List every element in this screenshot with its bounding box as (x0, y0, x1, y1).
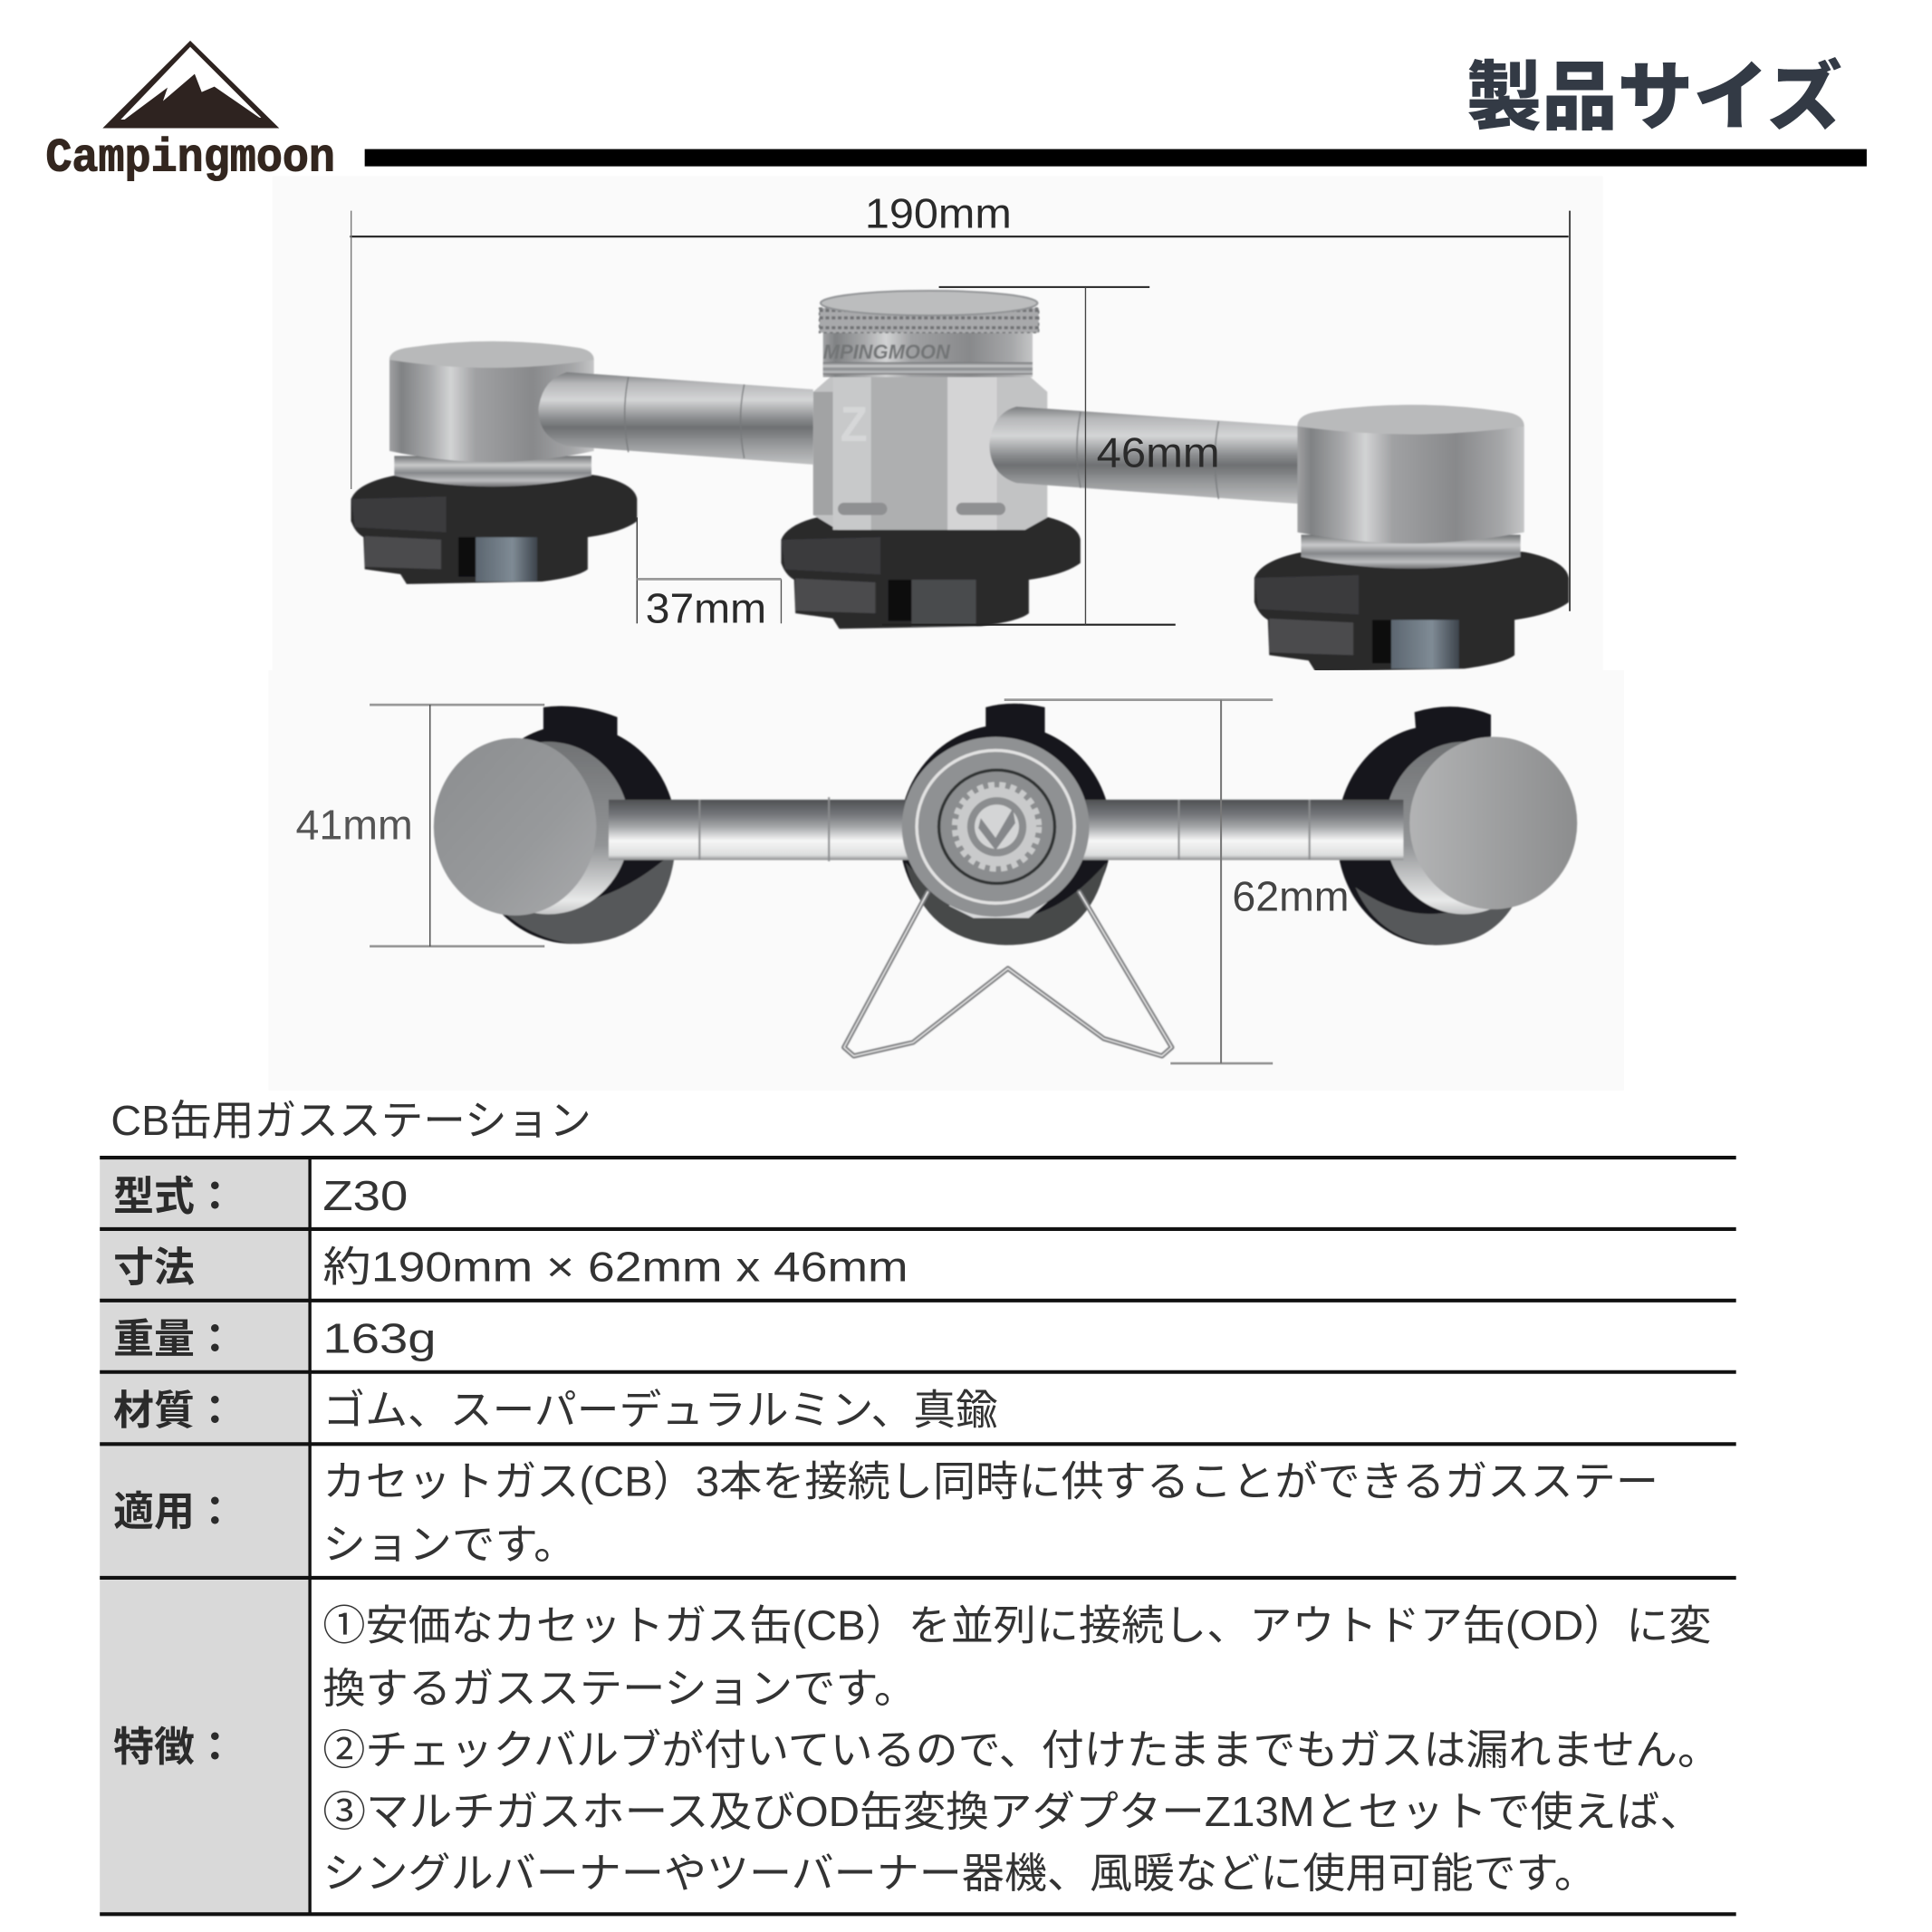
row: model: 型式： (113, 1163, 235, 1222)
row: features: ③マルチガスホース及びOD缶変換アダプターZ13Mとセットで使えば、 (322, 1788, 1703, 1835)
product: right tube (989, 407, 1302, 504)
product: side view assembly (351, 291, 1569, 671)
product: center base (781, 507, 1081, 629)
row: material: ゴム、スーパーデュラルミン、真鍮 (322, 1387, 998, 1434)
product: center hub: MPINGMOON (823, 341, 951, 363)
product: top view center hub (899, 704, 1111, 945)
header rule (365, 149, 1867, 167)
row: application: 適用： (113, 1478, 235, 1537)
panel: top view with dimensions (269, 670, 1624, 1091)
row: application: ションです。 (322, 1521, 577, 1568)
row: material: 材質： (113, 1378, 235, 1437)
dimension: 190mm: 190mm (865, 190, 1012, 237)
row: model: Z30 (322, 1172, 408, 1219)
table caption: CB缶用ガスステーション (111, 1097, 591, 1144)
row: features: 特徴： (113, 1714, 235, 1773)
dimension: 37mm: 37mm (646, 585, 766, 632)
spec table (100, 1157, 1736, 1915)
product: left tube (538, 372, 813, 465)
row: material (113, 1378, 998, 1437)
table rules (100, 1157, 1736, 1915)
row: dimensions: 寸法 (113, 1235, 195, 1293)
product: right base (1254, 544, 1569, 671)
row: model (113, 1163, 408, 1222)
title: 製品サイズ: 製品サイズ (1466, 36, 1842, 145)
row: weight: 163g (322, 1315, 437, 1362)
product: wire stand (844, 892, 1172, 1056)
row: weight: 重量： (113, 1306, 235, 1365)
product: center hub (813, 291, 1047, 530)
product: top view center disc with gear emblem (902, 736, 1090, 917)
row: features: ②チェックバルブが付いているので、付けたままでもガスは漏れません。 (322, 1726, 1720, 1773)
row: features (113, 1602, 1720, 1897)
product: right canister (1297, 405, 1524, 569)
product: top view left puck (434, 706, 677, 944)
row: weight (113, 1306, 437, 1365)
row: dimensions (113, 1235, 908, 1293)
product: top view tube (609, 797, 1403, 861)
row: application (113, 1457, 1658, 1568)
dimension: 46mm: 46mm (1097, 429, 1220, 476)
product: left canister (389, 341, 594, 486)
icon: mountain triangle (102, 41, 279, 128)
dimension: 62mm: 62mm (1232, 872, 1350, 919)
panel: side view with dimensions (273, 177, 1603, 671)
row: dimensions: 約190mm × 62mm x 46mm (322, 1244, 908, 1291)
row: application: カセットガス(CB）3本を接続し同時に供することができるガスステー (322, 1457, 1658, 1504)
dimension: 41mm: 41mm (295, 801, 413, 848)
row: features: ①安価なカセットガス缶(CB）を並列に接続し、アウトドア缶(OD）に変 (322, 1602, 1712, 1649)
product: top view right puck (1337, 706, 1577, 945)
product: left base (351, 468, 637, 584)
row: features: シングルバーナーやツーバーナー器機、風暖などに使用可能です。 (322, 1850, 1597, 1897)
logo: Campingmoon (45, 41, 335, 185)
label column background (100, 1157, 309, 1915)
product: center hub: Z (841, 397, 868, 452)
product: top view assembly (434, 704, 1577, 1056)
row: features: 換するガスステーションです。 (322, 1665, 917, 1712)
logo wordmark: Campingmoon (45, 131, 335, 185)
